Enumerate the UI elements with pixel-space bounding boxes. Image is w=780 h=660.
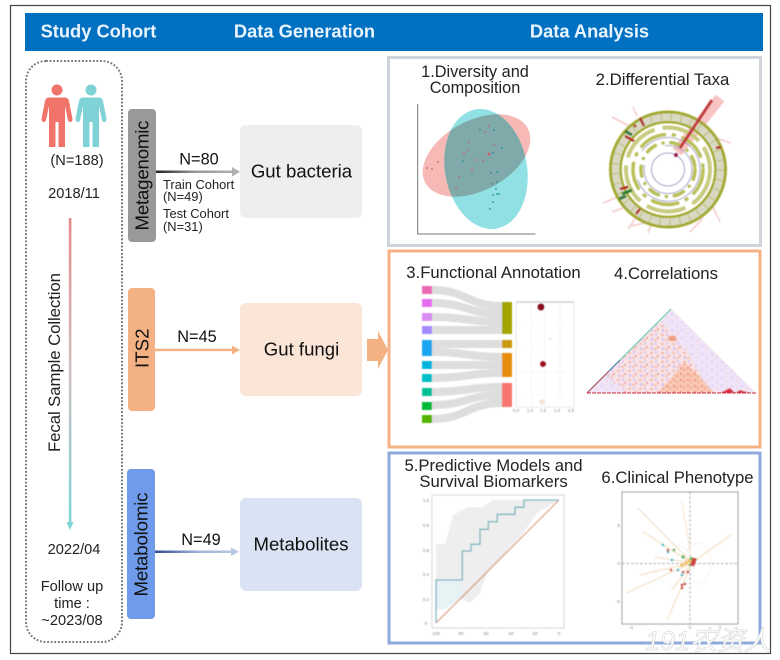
chart: enrichment dot plot: 0.0 [513, 408, 520, 413]
box: metabolites: Metabolites [253, 534, 349, 554]
chart: clinical biplot: 0 [689, 625, 692, 630]
end date: 2022/04 [48, 542, 100, 558]
data type: metabolomic: Metabolomic [130, 492, 152, 596]
data type: ITS2: ITS2 [132, 329, 152, 368]
arrow: generation to analysis [367, 331, 388, 369]
title: diversity and composition: Composition [430, 79, 520, 97]
chart: clinical biplot: 0 [617, 561, 620, 566]
chart: sankey diagram [422, 286, 512, 423]
title: functional annotation: 3.Functional Annotation [406, 263, 581, 282]
title: diversity and composition: 1.Diversity and [421, 63, 529, 81]
start date: 2018/11 [48, 186, 100, 202]
chart: enrichment dot plot: 2.5 [568, 408, 575, 413]
title: predictive models and survival biomarkers: Survival Biomarkers [419, 472, 568, 491]
title: differential taxa: 2.Differential Taxa [596, 70, 730, 89]
sample count: ITS2: N=45 [177, 328, 217, 346]
chart: PCoA ellipses [417, 104, 536, 234]
arrow: sampling timeline [66, 218, 74, 530]
chart: ROC curve: 0.6 [423, 548, 430, 553]
panel: predictive models and clinical phenotype [389, 453, 760, 643]
box: metabolites [240, 498, 362, 591]
follow up text: Follow up [41, 579, 103, 595]
chart: clinical biplot: 5 [617, 523, 620, 528]
title: correlations: 4.Correlations [614, 264, 718, 283]
icon: teal person [76, 84, 106, 147]
chart: clinical biplot: -5 [616, 599, 620, 604]
arrow: metagenomic to gut bacteria [156, 167, 240, 176]
panel: diversity and differential taxa [388, 58, 760, 246]
label: fecal sample collection: Fecal Sample Collection [45, 273, 64, 452]
chart: clinical biplot: 2 [719, 625, 722, 630]
chart: ROC curve: 0 [558, 631, 561, 636]
chart: enrichment dot plot: 1.5 [540, 408, 547, 413]
heading: data analysis: Data Analysis [530, 20, 649, 42]
sample count: metagenomic: N=80 [179, 150, 219, 168]
chart: ROC curve: 60 [483, 631, 489, 636]
follow up text: time : [54, 596, 90, 612]
header band [25, 13, 763, 51]
heading: data generation: Data Generation [234, 20, 375, 42]
chart: ROC curve: 0.8 [423, 523, 430, 528]
title: predictive models and survival biomarkers: 5.Predictive Models and [404, 456, 583, 475]
train cohort label: (N=49) [163, 189, 203, 204]
follow up text: ~2023/08 [41, 613, 103, 629]
chart: clinical biplot: -4 [629, 625, 633, 630]
train cohort label: Train Cohort [163, 177, 235, 192]
chart: ROC curve: 80 [458, 631, 464, 636]
box: gut fungi [240, 303, 362, 396]
test cohort label: Test Cohort [163, 206, 229, 221]
chart: ROC curve [423, 495, 564, 636]
sample count: metabolomic: N=49 [181, 531, 221, 549]
data type: metagenomic: Metagenomic [132, 120, 152, 230]
panel: study cohort [26, 61, 122, 642]
chart: ROC curve: 40 [508, 631, 514, 636]
icon: pink person [42, 84, 72, 147]
box: gut bacteria [240, 125, 362, 218]
data type: metabolomic [127, 469, 155, 619]
chart: ROC curve: 20 [532, 631, 538, 636]
panel: functional annotation and correlations [389, 251, 760, 447]
arrow: ITS2 to gut fungi [155, 346, 240, 354]
chart: ROC curve: 100 [432, 631, 440, 636]
data type: ITS2 [128, 288, 155, 411]
chart: clinical biplot [616, 492, 738, 630]
title: clinical phenotype: 6.Clinical Phenotype [601, 468, 754, 487]
chart: correlation triangle heatmap [587, 309, 756, 393]
chart: enrichment dot plot: 2.0 [554, 408, 561, 413]
chart: ROC curve: 0 [425, 621, 428, 626]
chart: ROC curve: 0.4 [423, 572, 430, 577]
cohort size: (N=188) [50, 153, 104, 169]
chart: ROC curve: 1.0 [423, 498, 430, 503]
chart: enrichment dot plot: 1.0 [527, 408, 534, 413]
test cohort label: (N=31) [163, 219, 203, 234]
chart: ROC curve: 0.2 [423, 597, 430, 602]
data type: metagenomic [128, 109, 156, 242]
box: gut bacteria: Gut bacteria [251, 160, 353, 182]
arrow: metabolomic to metabolites [155, 548, 239, 556]
chart: cladogram [603, 98, 731, 233]
box: gut fungi: Gut fungi [264, 338, 339, 360]
watermark: 191农资人 [645, 626, 771, 656]
chart: enrichment dot plot [513, 302, 575, 413]
heading: study cohort: Study Cohort [41, 20, 156, 42]
